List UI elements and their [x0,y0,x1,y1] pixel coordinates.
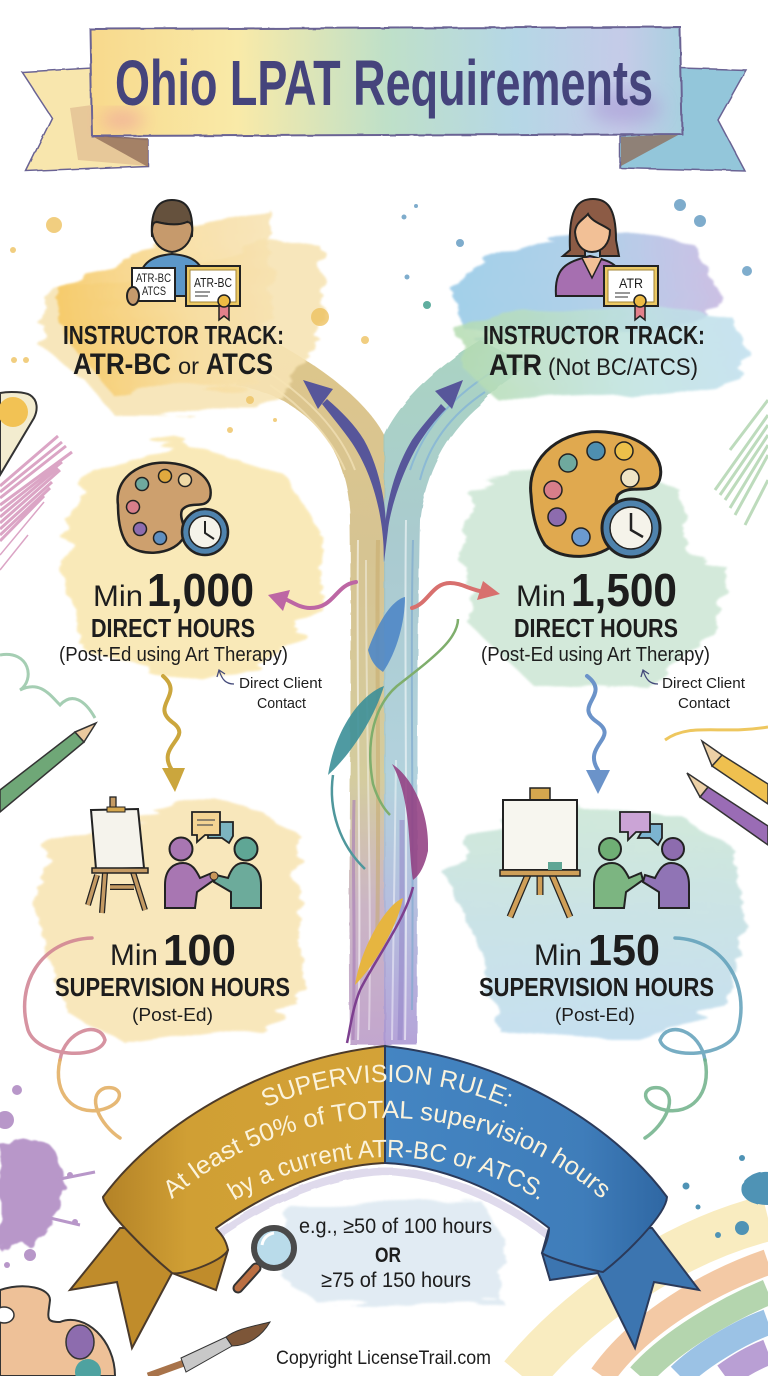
icon: palette and clock [118,463,228,555]
wash [285,1200,505,1305]
track name: ATR-BC [73,348,171,381]
wash [450,802,745,1042]
panel: 150 supervision hours [450,788,745,1042]
decoration: crayon rainbow [522,1218,768,1376]
icon: palette and clock [531,432,661,557]
track name [73,348,273,381]
decoration: blue splatter [682,1155,768,1238]
panel: instructor track ATR-BC [38,200,322,416]
decoration: purple splatter [0,1085,95,1268]
track name: ATCS [206,348,273,381]
hours figure [110,926,236,975]
icon: woman with certificate [556,199,658,320]
callout: direct client contact: Direct Client [662,675,746,692]
hours figure: 1,000 [147,564,254,616]
icon: person with certificate [127,200,240,320]
hours figure: 100 [163,926,236,975]
arrow: coral right [412,581,500,608]
note: (Post-Ed using Art Therapy) [59,644,288,666]
panel: 1000 direct hours [59,442,323,712]
wash upper [456,232,722,335]
icon: easel [500,788,580,917]
brush mark: yellow [355,898,403,985]
hours figure: Min [110,939,158,972]
label: DIRECT HOURS [91,613,255,643]
arrow: yellow squiggle [162,676,185,792]
hours figure [534,926,660,975]
brush mark: magenta [392,764,428,880]
icon: two people talking [165,812,261,908]
line: purple [347,887,413,1043]
example 1: e.g., ≥50 of 100 hours [299,1215,492,1238]
callout: direct client contact: Contact [257,695,307,712]
or: OR [375,1244,401,1267]
rule text: by a current ATR-BC or ATCS. [226,1140,540,1200]
label: SUPERVISION HOURS [55,972,290,1002]
hours figure: Min [534,939,582,972]
decoration: right green hatching [715,400,768,525]
label: DIRECT HOURS [514,613,678,643]
hours figure: Min [516,580,566,613]
hours figure [516,564,677,616]
brush mark: teal [328,686,384,775]
arrow: up right [384,380,463,562]
callout: direct client contact: Direct Client [239,675,323,692]
ribbon tail gold [70,1228,228,1348]
decoration: palette bottom left [0,1286,115,1376]
track name: ATR [489,349,542,382]
heading: INSTRUCTOR TRACK: [483,320,705,350]
branch arrows [303,380,463,562]
rule text: At least 50% of TOTAL supervision hours [166,1100,608,1200]
track name [489,349,698,382]
hours figure: Min [93,580,143,613]
icon: easel [88,797,148,913]
wash lower [458,305,750,402]
arrow: up left [303,380,386,562]
trunk left half [235,335,386,1045]
ribbon underside shadow [216,1171,549,1236]
note: (Post-Ed) [555,1005,635,1025]
wash strong [60,208,272,392]
track name: (Not BC/ATCS) [548,354,698,381]
icon: woman with certificate: ATR [619,275,643,291]
example 2: ≥75 of 150 hours [321,1269,471,1292]
ribbon tail blue [542,1228,699,1348]
banner tail left fold [70,105,148,166]
panel: instructor track ATR [456,199,750,402]
hours figure: 1,500 [571,564,677,616]
decoration: paintbrush [148,1322,270,1376]
banner tail left [22,68,148,171]
note: (Post-Ed) [132,1005,213,1025]
ribbon band gold [103,1046,385,1273]
wash [60,442,322,682]
callout: direct client contact [217,670,323,712]
decoration: spirals [25,938,741,1138]
wash pale [38,240,322,416]
wash accents [100,111,144,129]
arrow: blue squiggle [586,676,610,794]
icon: person with certificate: ATR-BC [194,275,232,290]
decoration: left paint tube and crayon scribble [0,392,72,570]
arrow: pink left [268,582,356,611]
brush mark: blue [368,597,405,672]
trunk right half [384,340,530,1045]
decoration: right pencils [665,727,768,845]
trunk streaks [265,370,495,1040]
copyright: Copyright LicenseTrail.com [276,1348,491,1369]
note: (Post-Ed using Art Therapy) [481,644,710,666]
icon: person with certificate: ATCS [142,286,166,298]
banner tail right [620,68,746,171]
paint splatter dots [10,199,752,433]
callout: direct client contact [641,670,746,712]
connector arrows between steps [162,581,610,794]
ribbon band blue [385,1046,667,1272]
rule text: SUPERVISION RULE: [262,1064,512,1107]
panel: 1500 direct hours [465,432,746,712]
icon: person with certificate: ATR-BC [136,273,171,285]
wash [465,452,725,690]
banner main [90,27,682,136]
line: green [370,619,458,815]
decoration: left green pencil [0,654,96,812]
wash [32,796,305,1048]
label: SUPERVISION HOURS [479,972,714,1002]
line: teal [332,775,365,869]
icon: two people talking [594,812,689,908]
callout: examples [238,1200,505,1305]
heading: INSTRUCTOR TRACK: [63,320,284,350]
hours figure [93,564,254,616]
title banner [22,27,746,171]
hours figure: 150 [588,926,660,975]
icon: magnifying glass [238,1228,294,1288]
track name: or [178,353,199,379]
central trunk and branches [235,335,530,1045]
banner fold shadows [92,134,680,167]
callout: direct client contact: Contact [678,695,731,712]
ribbon: supervision rule [68,1044,702,1351]
panel: 100 supervision hours [32,796,305,1048]
